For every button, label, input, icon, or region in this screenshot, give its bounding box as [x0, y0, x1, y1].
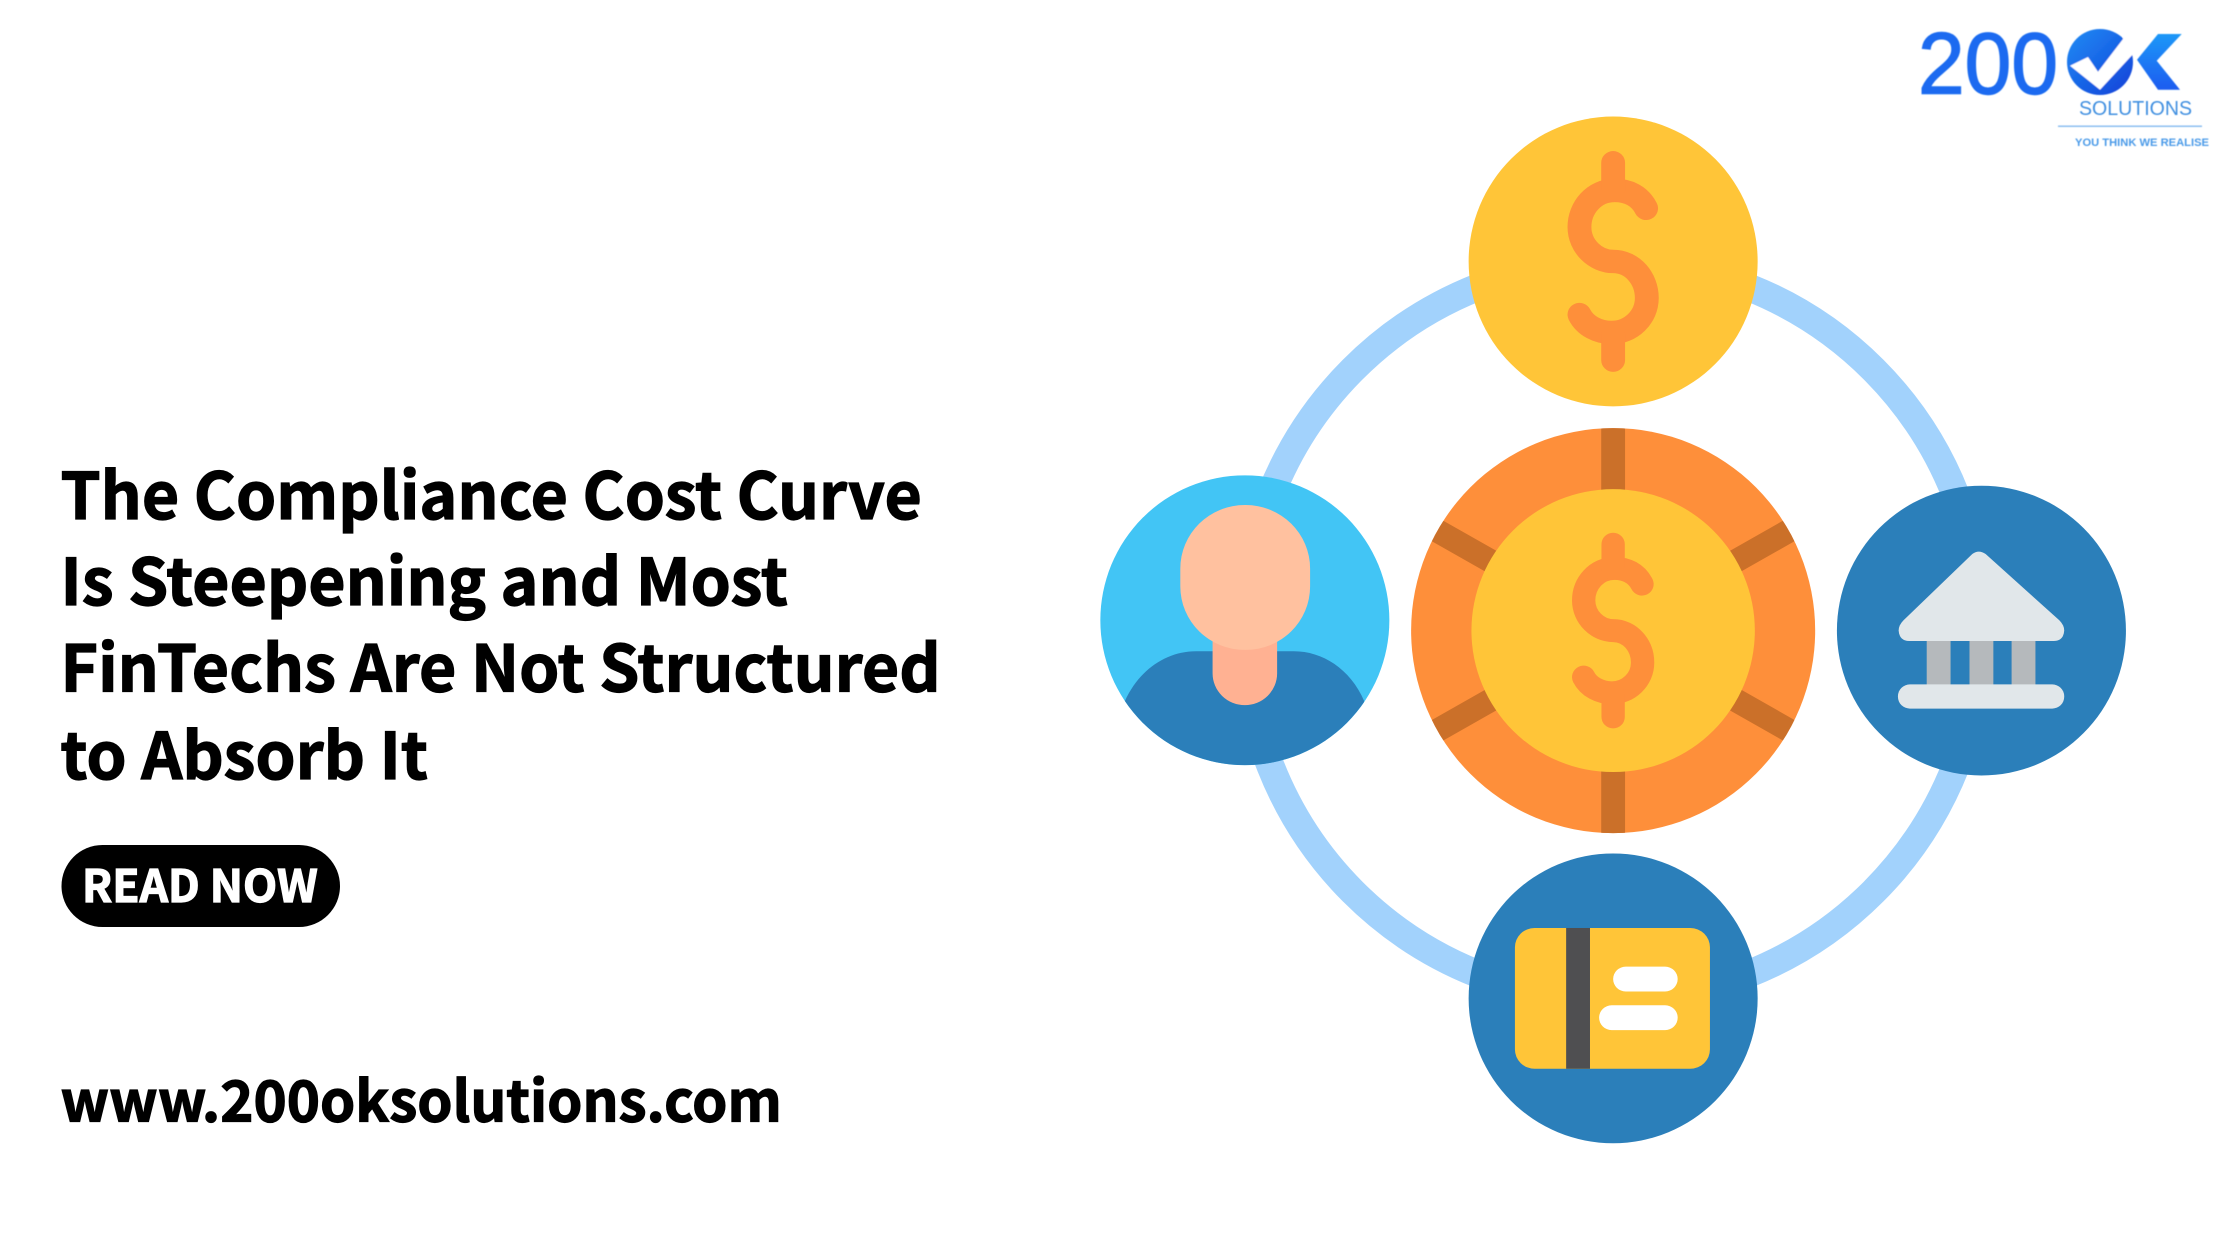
title: The Compliance Cost Curve — [60, 444, 922, 538]
title: to Absorb It — [60, 704, 428, 798]
icon: bank — [1898, 552, 2064, 709]
icon: card — [1515, 928, 1710, 1069]
read now button — [62, 845, 340, 927]
head — [1180, 505, 1310, 650]
logo: YOU THINK WE REALISE — [2075, 137, 2209, 149]
logo — [1918, 16, 2209, 149]
icon: center dollar sign — [1584, 544, 1643, 717]
neck — [1213, 631, 1277, 705]
top coin — [1469, 117, 1758, 406]
website url: www.200oksolutions.com — [60, 1058, 782, 1138]
person circle — [1100, 475, 1389, 769]
connecting ring — [1245, 261, 1981, 1000]
title: FinTechs Are Not Structured — [60, 616, 941, 710]
read now button: READ NOW — [82, 850, 318, 915]
diagram — [1100, 117, 2126, 1143]
bank circle — [1837, 486, 2126, 776]
title: Is Steepening and Most — [60, 530, 788, 624]
title — [60, 444, 941, 798]
logo: SOLUTIONS — [2079, 98, 2192, 120]
logo: 200 — [1918, 16, 2058, 112]
icon: dollar sign — [1579, 163, 1647, 360]
card circle — [1469, 853, 1758, 1143]
center coin — [1411, 424, 1815, 838]
